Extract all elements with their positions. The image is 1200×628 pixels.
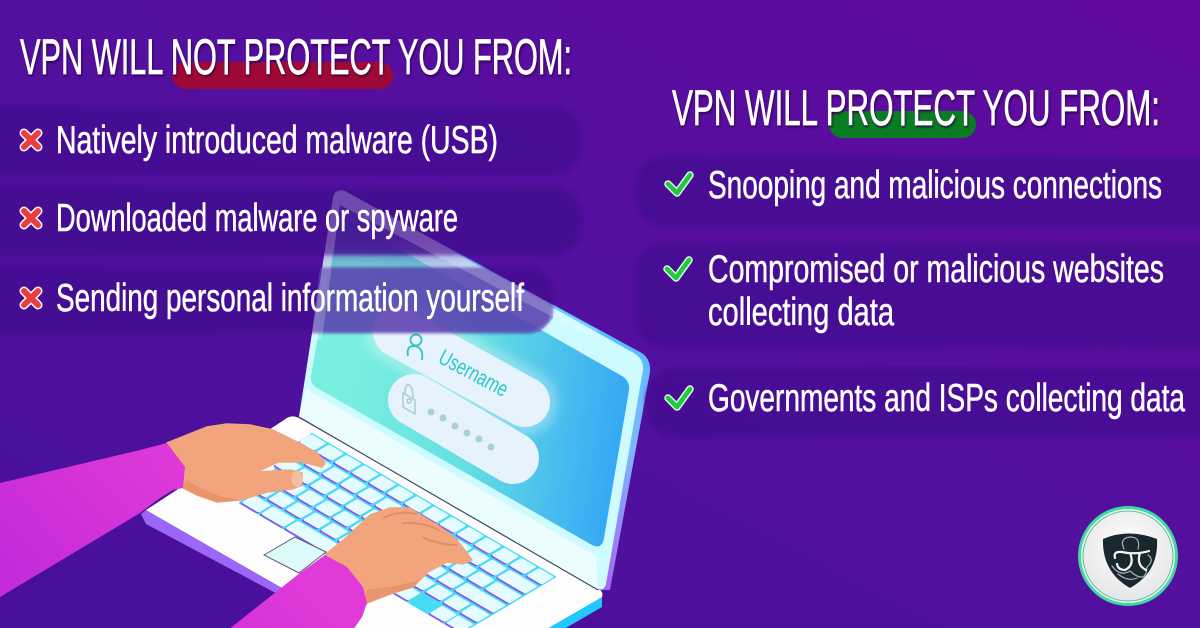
item: collecting data: collecting data	[708, 291, 894, 334]
left sleeve	[0, 443, 185, 597]
laptop base deck	[146, 416, 602, 628]
icon: check 2	[667, 260, 689, 278]
logo badge	[1078, 506, 1178, 606]
login fields	[398, 332, 525, 458]
laptop base side edge right	[530, 595, 602, 628]
laptop lid	[299, 190, 650, 590]
icon: cross 3	[24, 291, 38, 305]
laptop lid glass highlight	[311, 190, 600, 340]
touchpad	[264, 537, 326, 573]
item: sending personal information: Sending personal information yourself	[56, 277, 524, 320]
item: usb malware: Natively introduced malware (USB)	[56, 119, 498, 162]
right sleeve	[228, 555, 367, 628]
left hand	[167, 424, 325, 502]
logo shield	[1103, 534, 1157, 588]
highlight: not	[172, 62, 393, 89]
icon: lock	[403, 385, 415, 414]
icon: check 3	[668, 389, 690, 407]
laptop lid tint under third row	[312, 268, 553, 332]
item: downloaded malware: Downloaded malware or spyware	[56, 197, 458, 240]
password dots	[428, 408, 494, 450]
highlight: protect	[829, 111, 976, 138]
icon: cross 2	[24, 211, 38, 225]
icon: user	[408, 334, 422, 360]
icon: check 1	[668, 175, 690, 193]
icon: cross 1	[24, 133, 38, 147]
laptop base side edge	[141, 510, 285, 598]
heading: will not protect: VPN WILL NOT PROTECT YOU FROM:	[20, 29, 572, 85]
panel: not-protected rows	[0, 106, 582, 333]
logo monogram	[1112, 537, 1151, 579]
hinge line	[299, 417, 598, 590]
username label: Username	[435, 344, 513, 402]
right hand	[325, 508, 472, 603]
keyboard	[216, 433, 557, 628]
laptop illustration	[0, 190, 650, 628]
panel: protected rows	[635, 156, 1200, 438]
